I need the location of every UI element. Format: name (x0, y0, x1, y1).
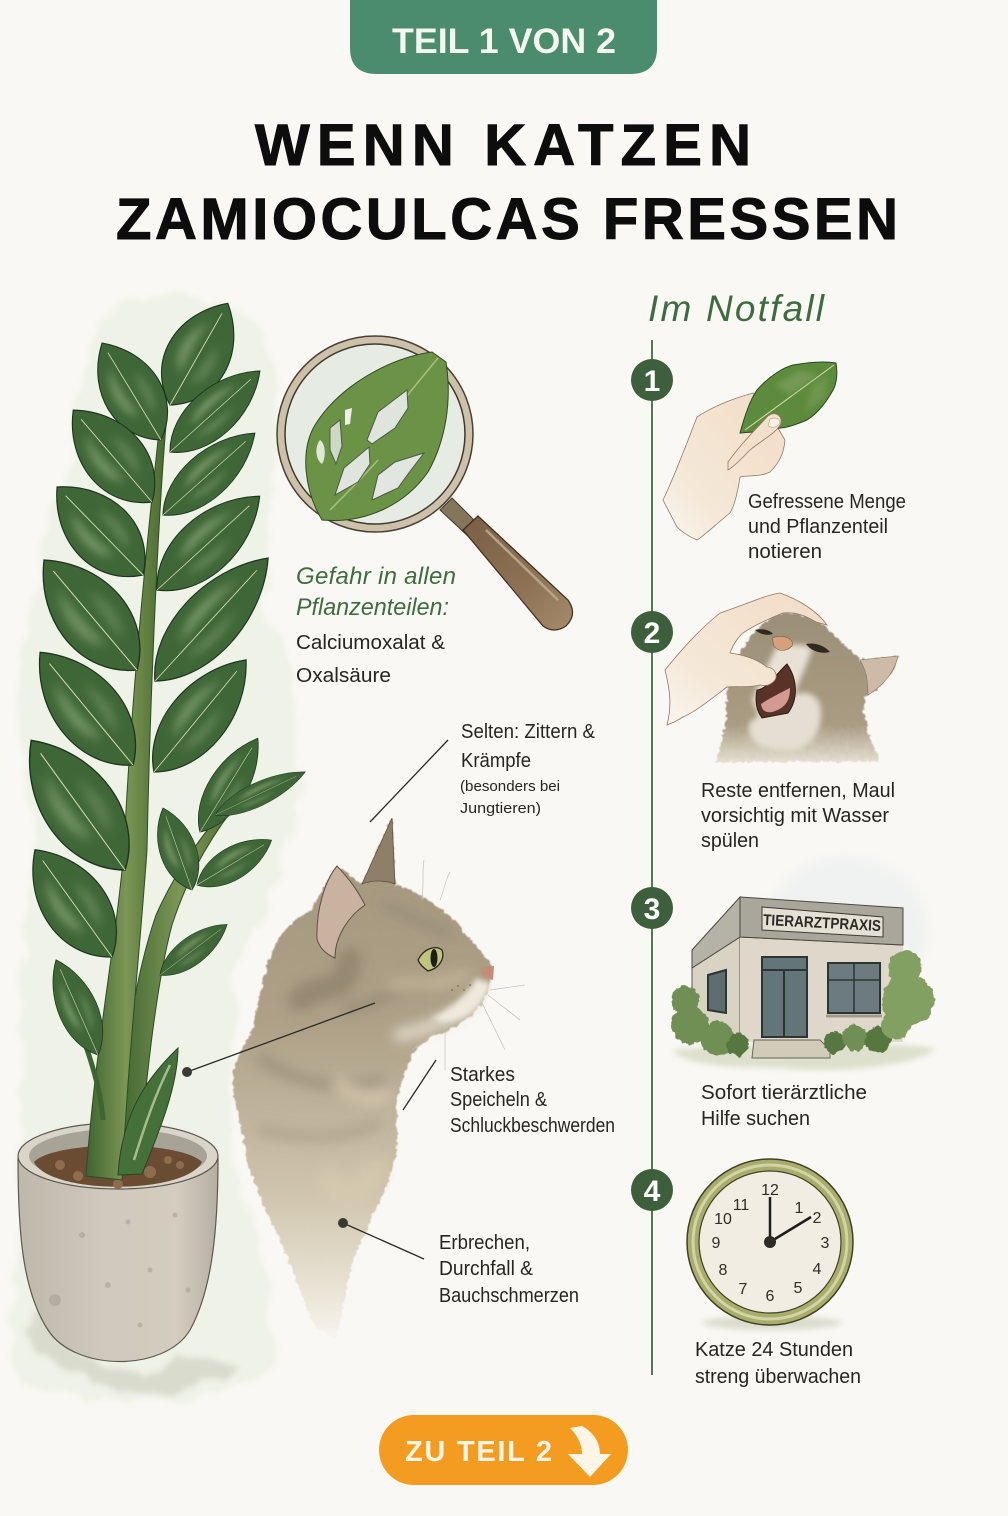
icon: clock: 10 (714, 1211, 732, 1228)
text: Gefressene Menge (748, 491, 906, 513)
icon: clock: 11 (733, 1197, 749, 1214)
label: Starkes Speicheln: Starkes (450, 1064, 515, 1086)
icon: vet clinic building (671, 856, 935, 1070)
callout dots (182, 1067, 348, 1228)
icon: clock: 8 (719, 1262, 728, 1279)
pot (18, 1123, 218, 1362)
top banner: Teil 1 von 2: TEIL 1 VON 2 (392, 22, 616, 61)
label: Starkes Speicheln (450, 1064, 615, 1137)
label: Starkes Speicheln: Schluckbeschwerden (450, 1115, 615, 1137)
badge 2: 2 (644, 617, 660, 650)
badge 1 (631, 359, 673, 401)
callout: Gefahr in allen Pflanzenteilen: Gefahr in allen (296, 563, 456, 590)
title (116, 113, 898, 252)
callout: Gefahr in allen Pflanzenteilen: Pflanzenteilen: (296, 594, 449, 621)
top banner: Teil 1 von 2 (350, 0, 657, 74)
badge 2 (631, 611, 673, 653)
label: Erbrechen, Durchfall: Durchfall & (439, 1258, 534, 1280)
button: Zu Teil 2 (379, 1415, 628, 1485)
icon: clock: 3 (821, 1235, 830, 1252)
icon: clock: 2 (813, 1210, 822, 1227)
title: WENN KATZEN (255, 113, 751, 178)
text: und Pflanzenteil (748, 516, 888, 538)
text: notieren (748, 541, 822, 563)
icon: clock: 4 (813, 1261, 822, 1278)
text: Sofort tierärztliche (701, 1082, 867, 1104)
label: Selten Zittern und Krämpfe: (besonders bei (460, 778, 560, 795)
icon: arrow (568, 1426, 611, 1477)
label: Selten Zittern und Krämpfe: Jungtieren) (460, 800, 541, 817)
text: spülen (701, 830, 759, 852)
label: Erbrechen, Durchfall: Erbrechen, (439, 1232, 530, 1254)
icon: hand holding leaf (663, 362, 837, 540)
title: ZAMIOCULCAS FRESSEN (116, 187, 898, 252)
text: vorsichtig mit Wasser (701, 805, 889, 827)
text (701, 1082, 867, 1130)
icon: clock: 7 (739, 1281, 748, 1298)
label: Selten Zittern und Krämpfe: Selten: Zittern & (461, 721, 596, 743)
label: Erbrechen, Durchfall (439, 1232, 579, 1307)
bushes (671, 951, 934, 1056)
label: Erbrechen, Durchfall: Bauchschmerzen (439, 1285, 579, 1307)
text (701, 780, 895, 852)
text (695, 1339, 861, 1388)
label: Selten Zittern und Krämpfe: Krämpfe (461, 750, 531, 772)
text: Katze 24 Stunden (695, 1339, 853, 1361)
cat fur bands (262, 905, 470, 1192)
text (748, 491, 906, 563)
badge 4 (631, 1169, 673, 1211)
icon: cat with open mouth and hand (665, 593, 898, 762)
step 4 (631, 1159, 861, 1388)
callout lines (187, 740, 448, 1259)
badge 4: 4 (644, 1175, 661, 1208)
step 1 (631, 359, 906, 563)
text: Reste entfernen, Maul (701, 780, 895, 802)
leaves (2, 288, 310, 1063)
callout: Gefahr in allen Pflanzenteilen: Oxalsäure (296, 665, 391, 687)
step 2 (631, 593, 898, 852)
label: Starkes Speicheln: Speicheln & (450, 1089, 548, 1111)
timeline line (651, 340, 653, 1375)
icon: clock: 6 (766, 1288, 775, 1305)
cat eye (418, 948, 443, 971)
icon: clock: 1 (795, 1200, 804, 1217)
plant watercolor wash (7, 292, 297, 1401)
cat ears (317, 866, 365, 958)
callout: Gefahr in allen Pflanzenteilen (296, 563, 456, 687)
plant: zamioculcas in pot (2, 288, 310, 1362)
callout: Gefahr in allen Pflanzenteilen: Calciumoxalat & (296, 632, 446, 654)
magnifying glass with crystals (277, 336, 573, 630)
badge 3: 3 (644, 893, 660, 926)
icon: vet clinic building: TIERARZTPRAXIS (763, 912, 881, 935)
icon: clock: 9 (712, 1235, 721, 1252)
icon: clock (687, 1159, 853, 1330)
handle (440, 498, 573, 630)
step 3 (631, 856, 935, 1130)
badge 3 (631, 887, 673, 929)
badge 1: 1 (644, 365, 660, 398)
icon: clock: 5 (794, 1280, 803, 1297)
button: Zu Teil 2: ZU TEIL 2 (405, 1436, 552, 1468)
label: Selten Zittern und Krämpfe (460, 721, 596, 817)
heading: Im Notfall: Im Notfall (648, 288, 826, 329)
text: Hilfe suchen (701, 1108, 810, 1130)
cat illustration (233, 818, 525, 1339)
icon: clock: 12 (761, 1182, 779, 1199)
stems (62, 425, 244, 1180)
text: streng überwachen (695, 1366, 861, 1388)
